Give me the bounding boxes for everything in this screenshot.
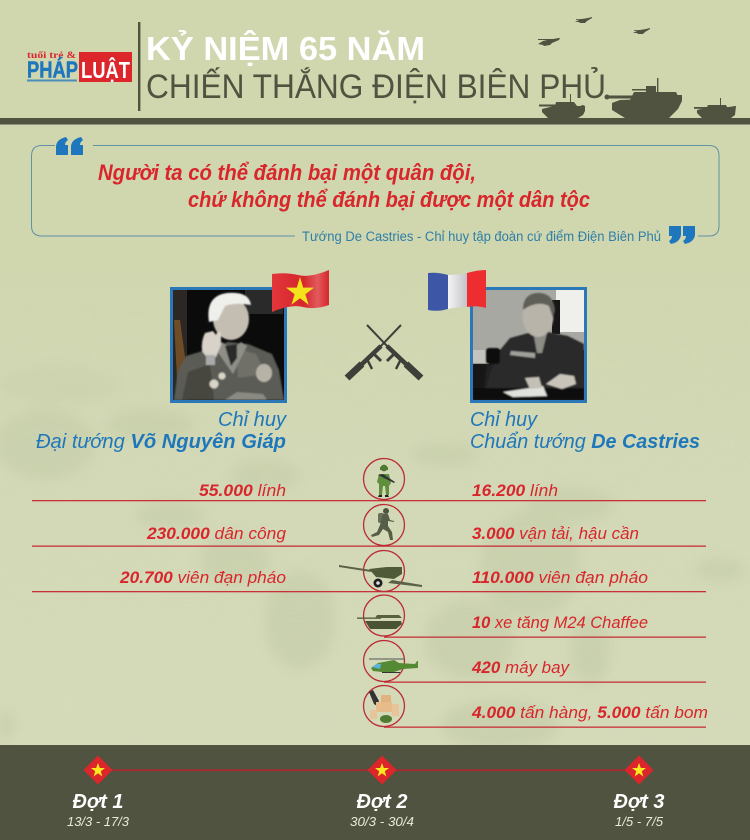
header rule [0, 118, 750, 124]
stats: France: 4.000 tấn hàng, 5.000 tấn bom [471, 703, 708, 722]
photo: Vo Nguyen Giap [172, 288, 286, 402]
stats: France: 10 xe tăng M24 Chaffee [472, 613, 648, 632]
icon: closing quote mark [669, 226, 695, 244]
icon: supplies [364, 686, 404, 726]
icon: crossed rifles [347, 325, 421, 378]
stats: France: 110.000 viên đạn pháo [472, 568, 648, 587]
icon: artillery gun [339, 550, 422, 592]
timeline point 2: 30/3 - 30/4 [350, 814, 414, 829]
stats: France: 420 máy bay [471, 658, 570, 677]
commander label: Vietnam: Đại tướng Võ Nguyên Giáp [36, 431, 286, 453]
quote box [32, 137, 719, 236]
stats: Vietnam: 230.000 dân công [146, 524, 287, 543]
icon: helicopter [364, 640, 418, 682]
title: KỶ NIỆM 65 NĂM [146, 30, 425, 68]
header logo [27, 50, 132, 83]
quote attribution: Tướng De Castries - Chỉ huy tập đoàn cứ điểm Điện Biên Phủ [302, 229, 661, 244]
header logo: PHÁP [27, 56, 78, 82]
header logo: LUẬT [81, 56, 130, 83]
icon: France flag [428, 270, 486, 311]
commander label: Vietnam: Chỉ huy [218, 409, 287, 431]
stats: France [471, 481, 708, 722]
quote text [98, 160, 590, 212]
stats: France: 16.200 lính [472, 481, 558, 500]
stats: Vietnam [119, 481, 287, 587]
stats: France: 3.000 vận tải, hậu cần [472, 524, 639, 543]
timeline point 3 [614, 756, 664, 829]
commander label: France [470, 409, 700, 453]
icon: soldier [364, 458, 404, 500]
timeline point 2: Đợt 2 [356, 791, 408, 813]
photo: De Castries [472, 288, 586, 402]
icon: opening quote mark [56, 137, 83, 155]
quote text: Người ta có thể đánh bại một quân đội, [98, 160, 476, 185]
icon: running porter [364, 504, 404, 546]
timeline point 2 [350, 756, 414, 829]
timeline point 1 [67, 756, 130, 829]
title [146, 30, 606, 106]
footer band [0, 745, 750, 840]
icon: tank [357, 595, 404, 636]
header logo: tuổi trẻ & [27, 50, 76, 61]
timeline point 1: Đợt 1 [72, 791, 124, 813]
background [0, 415, 750, 745]
commander label: France: Chuẩn tướng De Castries [470, 431, 700, 453]
commander label: Vietnam [36, 409, 287, 453]
timeline point 1: 13/3 - 17/3 [67, 814, 130, 829]
icons: tanks [539, 78, 736, 118]
icon: Vietnam flag [272, 270, 329, 312]
header divider [138, 22, 140, 111]
timeline connector [98, 769, 639, 771]
quote text: chứ không thể đánh bại được một dân tộc [188, 187, 590, 212]
stats: Vietnam: 20.700 viên đạn pháo [119, 568, 286, 587]
stats: Vietnam: 55.000 lính [199, 481, 286, 500]
timeline point 3: 1/5 - 7/5 [615, 814, 664, 829]
comparison row rules [32, 500, 706, 728]
commander label: France: Chỉ huy [470, 409, 538, 431]
icons: helicopters [538, 17, 650, 46]
title: CHIẾN THẮNG ĐIỆN BIÊN PHỦ [146, 68, 606, 106]
timeline point 3: Đợt 3 [614, 791, 664, 813]
